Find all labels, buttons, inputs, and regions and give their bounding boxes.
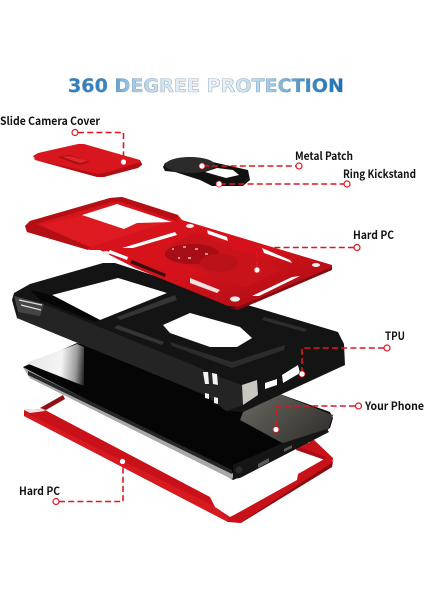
ring kickstand and metal patch [163, 157, 250, 186]
bottom hard PC frame [24, 395, 333, 523]
ring mount [165, 232, 282, 288]
phone [23, 343, 333, 480]
label: Hard PC upper [254, 227, 394, 273]
title: 360 DEGREE PROTECTION [68, 76, 344, 97]
label: Slide Camera Cover [0, 113, 126, 165]
ring hole [163, 313, 252, 347]
label: Hard PC lower [19, 458, 126, 504]
camera window [52, 278, 167, 320]
plate slots [252, 276, 300, 296]
label: Slide Camera Cover: Slide Camera Cover [0, 113, 100, 129]
label: TPU [299, 328, 405, 377]
slide camera cover [33, 144, 142, 177]
label: Hard PC lower: Hard PC [19, 483, 60, 499]
side wall [17, 304, 243, 411]
label: TPU: TPU [385, 328, 405, 344]
label: Metal Patch [199, 148, 353, 169]
label: Ring Kickstand: Ring Kickstand [343, 166, 416, 182]
camera window [82, 204, 172, 229]
TPU case [12, 263, 345, 412]
ribs and ports [170, 342, 285, 368]
label: Your Phone [273, 398, 424, 432]
label: Hard PC upper: Hard PC [353, 227, 394, 243]
camera slider [42, 215, 178, 247]
label: Metal Patch: Metal Patch [295, 148, 353, 164]
red hard PC back plate [25, 197, 332, 310]
label: Ring Kickstand [216, 166, 416, 187]
